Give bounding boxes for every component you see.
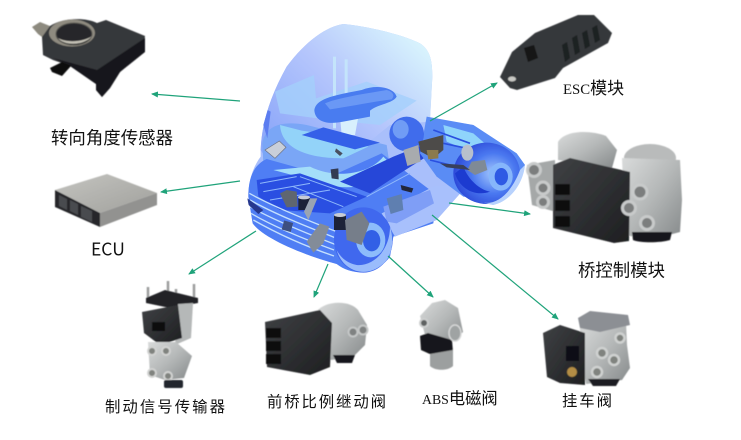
headlamp dark strip bbox=[247, 198, 263, 214]
label: trailer valve: 挂车阀 bbox=[562, 392, 612, 410]
ESC connector bbox=[524, 45, 538, 62]
label: steering angle sensor: 转向角度传感器 bbox=[51, 128, 173, 148]
steering sensor mini bbox=[335, 148, 343, 156]
rear valve cluster bbox=[418, 135, 443, 158]
label: axle control module: 桥控制模块 bbox=[578, 260, 665, 280]
engine bay dark bbox=[257, 173, 367, 213]
side body panel bbox=[382, 185, 463, 237]
air tank highlight bbox=[393, 120, 409, 139]
dashboard and seat area bbox=[262, 123, 390, 183]
box connectors bbox=[266, 328, 281, 364]
arrow: to trailer valve bbox=[432, 215, 558, 319]
control box bbox=[553, 158, 630, 243]
whole truck silhouette bbox=[248, 24, 525, 272]
silver ECU rear bbox=[403, 145, 421, 166]
engine texture bbox=[260, 173, 410, 207]
label: ABS solenoid valve: ABS电磁阀 bbox=[422, 385, 498, 409]
label: front axle relay valve: 前桥比例继动阀 bbox=[267, 393, 386, 411]
rear hub dots bbox=[495, 168, 508, 185]
rear cyan highlights bbox=[443, 125, 500, 157]
control box bbox=[543, 325, 585, 385]
ECU top face bbox=[55, 174, 157, 213]
truck cutaway illustration bbox=[247, 24, 525, 273]
mid chassis valves bbox=[387, 194, 403, 214]
front wheel bbox=[334, 207, 393, 273]
rear valve right bbox=[467, 160, 487, 175]
black base bbox=[164, 380, 183, 388]
front cylinder top bbox=[334, 213, 346, 217]
top silver valve bbox=[420, 300, 463, 345]
bunk bed bbox=[314, 87, 397, 123]
top plate bbox=[578, 311, 630, 332]
rear bracket bbox=[440, 163, 470, 170]
sensor body bbox=[42, 19, 145, 97]
mid ECU bbox=[401, 185, 413, 193]
seat pedestal bbox=[340, 117, 358, 135]
front valve cluster left bbox=[280, 190, 298, 207]
photo: ABS solenoid valve bbox=[420, 300, 463, 370]
spring cap left bbox=[298, 195, 310, 199]
ports bbox=[348, 326, 368, 336]
front bumper stripes bbox=[249, 193, 337, 256]
rear air spring bbox=[461, 145, 473, 161]
sensor ring bore bbox=[56, 23, 92, 45]
rear silhouette light edge bbox=[480, 165, 525, 205]
connector bbox=[152, 322, 165, 331]
small valve group bbox=[307, 223, 329, 253]
brass valve rear bbox=[427, 150, 438, 159]
control box bbox=[265, 310, 332, 375]
ECU connectors bbox=[59, 195, 92, 222]
label: ECU: ECU bbox=[91, 236, 125, 262]
upper silver body bbox=[175, 303, 193, 345]
centre sensors bbox=[331, 168, 339, 179]
air tank bbox=[389, 117, 424, 151]
right valve dome bbox=[624, 144, 676, 172]
arrow: to axle control module bbox=[449, 203, 530, 214]
arrow: to ESC module bbox=[430, 83, 497, 121]
right valve body bbox=[622, 158, 682, 240]
truck cab shell bbox=[261, 24, 432, 170]
box connectors bbox=[555, 184, 570, 227]
rear rim bbox=[489, 163, 513, 191]
photo: trailer valve bbox=[543, 311, 630, 386]
windshield pillar bbox=[263, 110, 271, 138]
arrow: to ECU bbox=[161, 181, 240, 192]
front hub bbox=[363, 230, 380, 251]
ECU right face bbox=[100, 193, 157, 227]
studs bbox=[148, 281, 194, 302]
ladder bbox=[333, 57, 348, 131]
rear chassis bbox=[420, 117, 525, 200]
front wheel outer lip bbox=[337, 227, 392, 272]
front rim bbox=[356, 223, 385, 257]
ESC body bbox=[500, 15, 612, 90]
brass fitting bbox=[567, 367, 577, 377]
silver valve body bbox=[580, 322, 630, 384]
front valve cluster right bbox=[345, 212, 369, 245]
left bracket bbox=[304, 198, 317, 220]
rear dark strokes bbox=[430, 130, 490, 167]
cylinder bbox=[430, 350, 453, 370]
sensor front side bbox=[53, 38, 145, 97]
side ring bbox=[449, 325, 461, 341]
front air spring right bbox=[334, 215, 346, 230]
label: ESC module: ESC模块 bbox=[563, 74, 624, 99]
silver mirror unit bbox=[265, 141, 286, 158]
ports bbox=[528, 164, 654, 230]
arrow: to brake signal transmitter bbox=[189, 231, 256, 274]
left valve dome bbox=[558, 132, 617, 168]
sensor ring bbox=[49, 20, 95, 46]
cab floor plane bbox=[275, 75, 417, 125]
left port bracket bbox=[527, 160, 556, 212]
photo: steering angle sensor bbox=[32, 19, 145, 97]
lower ports bbox=[148, 347, 172, 380]
arrow: to steering angle sensor bbox=[152, 94, 240, 101]
front air spring left bbox=[298, 197, 310, 210]
side port bbox=[420, 319, 428, 327]
sensor left tab bbox=[32, 22, 50, 40]
rear wheel bbox=[453, 143, 520, 204]
sensor connector bbox=[50, 62, 71, 76]
inner dashboard curve bbox=[280, 125, 368, 158]
seat dark panel bbox=[302, 127, 380, 149]
ESC top ribs bbox=[562, 25, 600, 62]
pillow highlight bbox=[325, 90, 393, 109]
lower body bbox=[248, 153, 437, 272]
black base ring bbox=[333, 355, 355, 363]
lower silver body bbox=[148, 342, 192, 380]
black ring base bbox=[632, 232, 672, 242]
chassis frame bbox=[340, 143, 432, 193]
black solenoid bbox=[420, 333, 453, 355]
top plate bbox=[146, 290, 198, 308]
photo: ECU bbox=[55, 174, 157, 227]
arrow: to front axle relay valve bbox=[314, 264, 328, 297]
round control unit bbox=[142, 305, 182, 345]
ports bbox=[592, 334, 624, 377]
ESC mounting hole bbox=[508, 76, 516, 82]
side tank bbox=[383, 190, 434, 223]
arrow: to ABS solenoid valve bbox=[388, 256, 433, 297]
sensor ring inner light bbox=[58, 36, 92, 44]
rear dark tyre bbox=[455, 167, 490, 193]
photo: front axle relay valve bbox=[265, 303, 368, 375]
connector bbox=[566, 346, 579, 361]
grille badge bbox=[282, 221, 293, 232]
silver valve body bbox=[316, 303, 367, 360]
photo: brake signal transmitter bbox=[142, 281, 198, 388]
cab lower cyan band bbox=[273, 157, 393, 187]
ECU front face bbox=[55, 190, 100, 227]
label: brake signal transmitter: 制动信号传输器 bbox=[105, 398, 225, 416]
photo: ESC module bbox=[500, 15, 612, 90]
photo: axle control module bbox=[527, 132, 682, 243]
black ring base bbox=[588, 379, 620, 386]
